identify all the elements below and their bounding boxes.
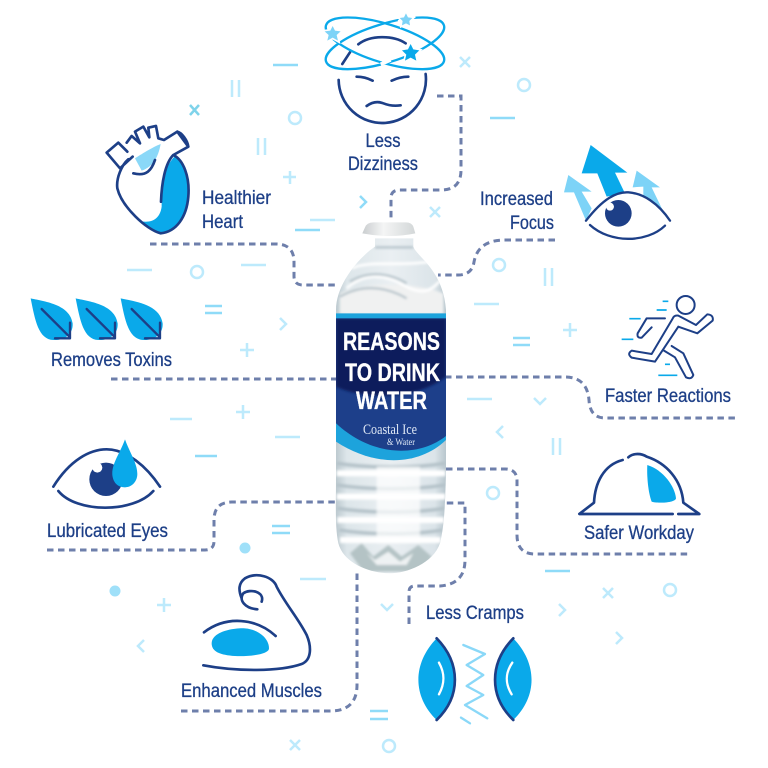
icon: eye with arrows [564, 145, 670, 239]
bottle label [336, 313, 446, 460]
label: increased focus [480, 189, 554, 234]
label: safer workday: Safer Workday [584, 523, 694, 544]
panel: faster reactions [605, 296, 731, 407]
label title: TO DRINK [345, 359, 440, 387]
icon: dizzy face [320, 7, 450, 123]
panel: lubricated eyes [47, 439, 168, 542]
label: healthier heart [202, 188, 272, 233]
label title: WATER [356, 387, 427, 415]
connector: workday [446, 469, 688, 554]
label: healthier heart: Healthier [202, 188, 272, 209]
label: increased focus: Increased [480, 189, 553, 210]
connector: heart [150, 244, 336, 285]
icon: eye with drop [53, 439, 160, 508]
connector: reactions [445, 377, 737, 418]
label brand [363, 422, 417, 447]
label: less dizziness: Dizziness [348, 154, 418, 175]
connector: cramps [409, 503, 465, 624]
label: less dizziness: Less [366, 131, 400, 152]
label title: REASONS [343, 328, 440, 356]
icon: runner [622, 296, 713, 378]
label: less dizziness [348, 131, 418, 175]
panel: less cramps [418, 603, 532, 723]
bottle cap [362, 222, 415, 236]
connector: eyes [47, 502, 336, 550]
label: removes toxins: Removes Toxins [51, 350, 172, 371]
connector: dizziness [391, 96, 461, 220]
label: less cramps: Less Cramps [426, 603, 524, 624]
panel: enhanced muscles [181, 575, 322, 702]
connector: muscles [181, 572, 357, 711]
icon: hard hat [579, 454, 699, 514]
label: lubricated eyes: Lubricated Eyes [47, 521, 168, 542]
panel: less dizziness [320, 7, 450, 175]
icon: heart [107, 126, 189, 233]
panel: safer workday [579, 454, 699, 544]
panel: healthier heart [107, 126, 272, 233]
label brand: & Water [387, 437, 415, 447]
panel: increased focus [480, 145, 670, 239]
water bottle [336, 222, 446, 573]
icon: cramping muscle [418, 638, 532, 723]
panel: removes toxins [31, 298, 172, 371]
label: enhanced muscles: Enhanced Muscles [181, 681, 322, 702]
connector: focus [438, 240, 555, 275]
connector: toxins [111, 378, 336, 380]
label brand: Coastal Ice [363, 422, 417, 438]
label title [343, 328, 440, 415]
bottle body [336, 238, 446, 573]
icon: flexed arm [203, 575, 310, 670]
icon: three leaves [31, 298, 163, 340]
label: faster reactions: Faster Reactions [605, 386, 731, 407]
label: increased focus: Focus [510, 213, 554, 234]
label: healthier heart: Heart [202, 212, 244, 233]
